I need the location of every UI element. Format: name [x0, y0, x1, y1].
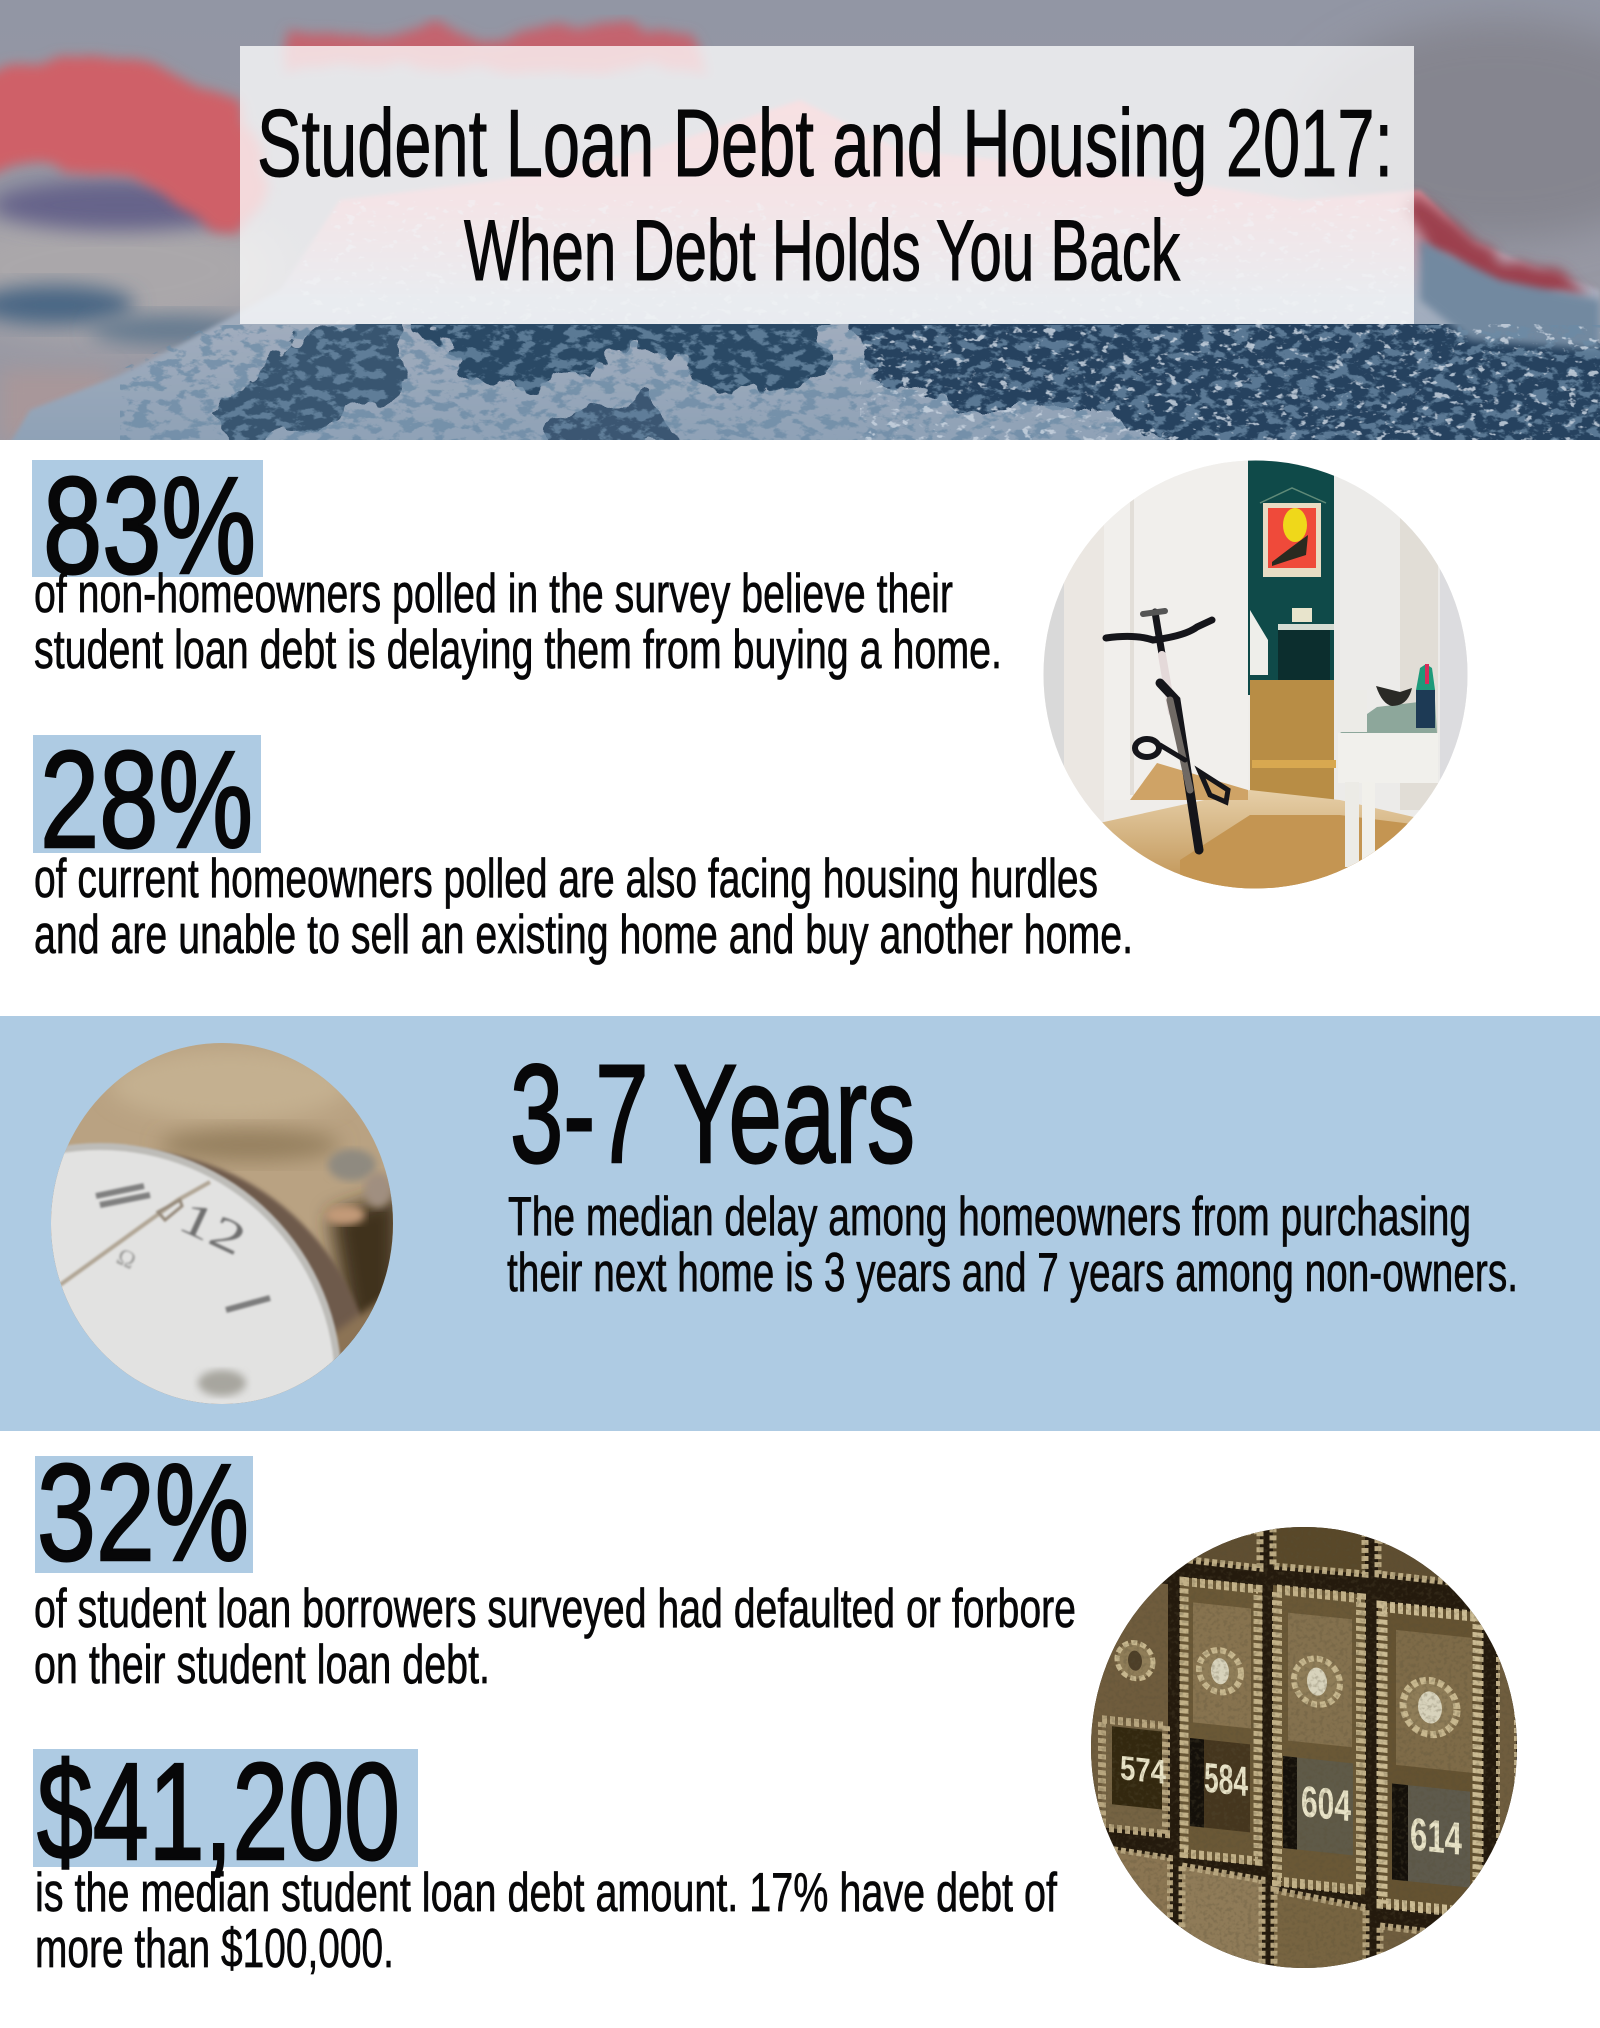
stat: 32%	[34, 1436, 1076, 1695]
door 614	[1378, 1602, 1482, 1918]
wall art	[1260, 488, 1326, 577]
band background	[0, 1016, 1600, 1431]
description line 2: more than $100,000.	[35, 1917, 394, 1979]
highlight block	[32, 460, 263, 577]
highlight block	[33, 1749, 418, 1867]
stat: 28%	[33, 723, 1133, 965]
number 32%: 32%	[37, 1436, 249, 1590]
mountain photo background	[0, 0, 1600, 460]
title box	[240, 46, 1414, 324]
description line 1: of current homeowners polled are also facing housing hurdles	[34, 847, 1098, 909]
description line 1: is the median student loan debt amount. 17% have debt of	[35, 1861, 1058, 1923]
photo: pocket watch	[51, 1043, 393, 1404]
number 28%: 28%	[40, 723, 253, 877]
watch hands and numerals	[60, 1182, 270, 1396]
metal grain overlay	[1085, 1520, 1525, 1975]
highlight block	[33, 735, 261, 853]
header panel: mountain photo with title	[0, 0, 1600, 460]
side door strip	[1498, 1650, 1516, 1870]
door 574: 574	[1120, 1749, 1166, 1792]
door 614: 614	[1410, 1807, 1462, 1865]
door 574	[1090, 1576, 1168, 1834]
door 584: 584	[1204, 1754, 1248, 1805]
heading: 3-7 Years: 3-7 Years	[510, 1035, 915, 1192]
panel: 3-7 years band	[0, 1016, 1600, 1431]
door 604: 604	[1301, 1777, 1351, 1831]
table	[1337, 664, 1438, 870]
photo: brass post office boxes	[1085, 1520, 1525, 1975]
description line 1: of student loan borrowers surveyed had defaulted or forbore	[34, 1577, 1076, 1639]
number $41,200: $41,200	[37, 1735, 400, 1889]
highlight block	[35, 1456, 253, 1573]
top row doors	[1190, 1520, 1450, 1582]
stat: $41,200	[33, 1735, 1058, 1979]
watch hands and numerals: 12	[172, 1191, 253, 1266]
description line 2: and are unable to sell an existing home and buy another home.	[34, 903, 1133, 965]
bicycle	[1106, 611, 1228, 850]
stat: 83%	[32, 449, 1002, 680]
title line 2: When Debt Holds You Back	[464, 203, 1181, 299]
description line 1: of non-homeowners polled in the survey believe their	[34, 562, 953, 624]
photo: hallway with bicycle	[1040, 455, 1470, 895]
door 604	[1273, 1585, 1365, 1895]
door 584	[1180, 1577, 1262, 1866]
number 83%: 83%	[43, 449, 256, 603]
description line 2: student loan debt is delaying them from buying a home.	[34, 618, 1002, 680]
description line 2: on their student loan debt.	[34, 1633, 490, 1695]
bottom row doors	[1114, 1846, 1426, 1968]
watch hands and numerals: Ω	[112, 1244, 140, 1275]
